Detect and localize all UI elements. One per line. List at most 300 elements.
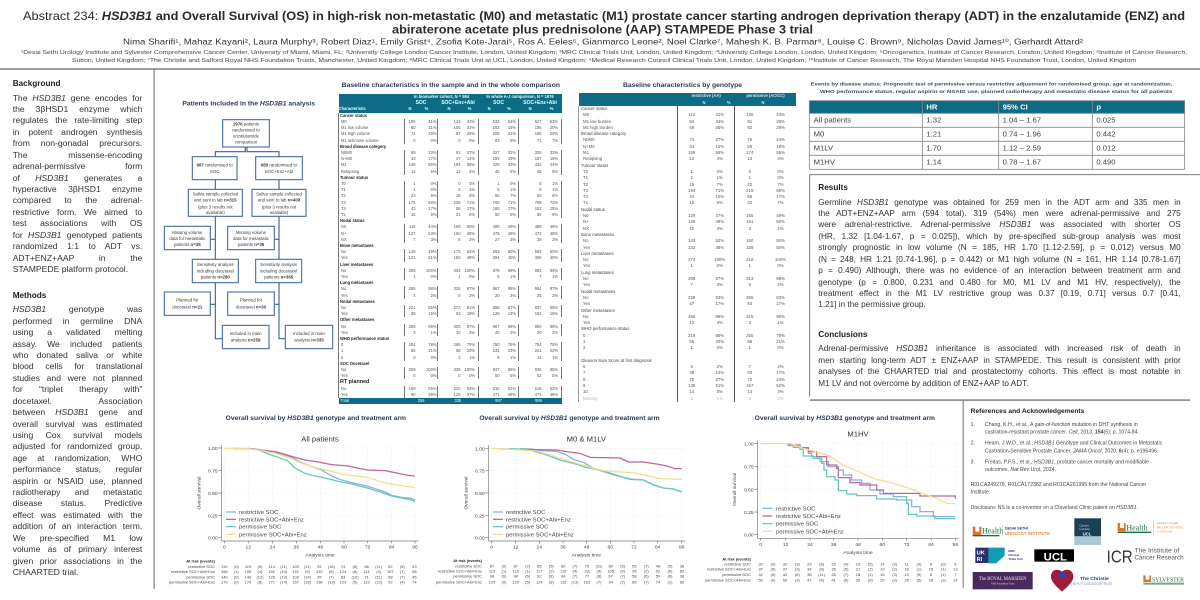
table: baseline characteristics in sample and whole comparison: 0%	[469, 181, 475, 186]
table: baseline characteristics in sample and whole comparison: 982	[535, 268, 542, 273]
table: baseline characteristics by genotype: NX	[583, 226, 589, 231]
text: methods paragraph: using a validated melting	[13, 327, 142, 337]
table: baseline characteristics by genotype: Gleason Sum Score at first diagnosis	[581, 358, 652, 363]
text: background paragraph: restrictive form. We aimed to	[13, 207, 142, 217]
table: baseline characteristics in sample and whole comparison: 27	[495, 237, 500, 242]
table: baseline characteristics in sample and whole comparison: 209	[493, 131, 500, 136]
table: baseline characteristics in sample and whole comparison: 518	[535, 386, 542, 391]
chart: All patients: 84	[389, 545, 395, 551]
risk table: All patients: 123	[340, 580, 347, 585]
table: baseline characteristics in sample and whole comparison: 13%	[508, 311, 516, 316]
table: baseline characteristics in sample and whole comparison: 20%	[550, 125, 558, 130]
affiliations	[21, 49, 1188, 64]
hazard ratio table: 0.78 – 1.67	[1003, 158, 1041, 167]
table: baseline characteristics in sample and whole comparison: 50	[495, 373, 500, 378]
table: baseline characteristics in sample and whole comparison: No	[341, 286, 346, 291]
table: baseline characteristics by genotype: 0%	[717, 345, 723, 350]
table: baseline characteristics in sample and whole comparison: 1%	[552, 274, 558, 279]
risk table: M0 & M1LV: (2)	[644, 569, 649, 574]
table: baseline characteristics in sample and whole comparison: 59	[411, 150, 416, 155]
table: baseline characteristics by genotype: 2%	[777, 396, 784, 401]
table: baseline characteristics by genotype: 7	[749, 364, 751, 369]
table: baseline characteristics in sample and whole comparison: 72%	[550, 200, 558, 205]
table: baseline characteristics in sample and whole comparison: 3%	[552, 237, 558, 242]
table: baseline characteristics in sample and whole comparison: 210	[454, 386, 460, 391]
table: baseline characteristics in sample and whole comparison: M1 high volume	[341, 131, 370, 136]
flowchart box text: analysis n=259	[231, 337, 261, 342]
table: baseline characteristics in sample and whole comparison: T4	[341, 206, 346, 211]
risk table: All patients: 107	[387, 569, 394, 574]
table: baseline characteristics in sample and whole comparison: 2	[458, 187, 460, 192]
table: baseline characteristics in sample and whole comparison: 99%	[508, 268, 516, 273]
table: baseline characteristics in sample and whole comparison: 105	[409, 119, 416, 124]
table: baseline characteristics in sample and whole comparison: 16	[411, 212, 416, 217]
table: baseline characteristics by genotype: 100%	[775, 257, 786, 262]
risk table: M0 & M1LV: (7)	[644, 579, 649, 584]
title	[23, 9, 1185, 37]
results box outline	[810, 175, 1200, 397]
table: baseline characteristics in sample and whole comparison: 52%	[467, 249, 475, 254]
risk table: M0 & M1LV: (7)	[573, 574, 578, 579]
legend: M1HV	[762, 506, 844, 535]
table: baseline characteristics in sample and whole comparison: 37%	[467, 392, 475, 397]
table: baseline characteristics by genotype: 4%	[777, 389, 784, 394]
table: baseline characteristics by genotype: 29%	[776, 125, 785, 130]
logo: UHealth Miller School: Health	[1126, 523, 1148, 532]
risk table: M1HV: permissive SOC+Abi+Enz	[705, 578, 751, 583]
risk table: M1HV: 18	[856, 572, 861, 577]
chart: M1HV: 36	[831, 542, 837, 548]
flowchart box text: Missing volume	[172, 230, 203, 235]
text: methods paragraph: effect was estimated with the	[13, 510, 142, 520]
table: baseline characteristics in sample and whole comparison: 1	[413, 187, 416, 192]
table: baseline characteristics by genotype: 50%	[776, 219, 785, 224]
legend: M1HV: restrictive SOC	[776, 506, 816, 512]
table: baseline characteristics in sample and whole comparison: 708	[535, 200, 542, 205]
flowchart box text: Included in main	[230, 331, 262, 336]
risk table: M1HV: 37	[783, 567, 788, 572]
table: baseline characteristics in sample and whole comparison: 53%	[428, 231, 436, 236]
table: baseline characteristics by genotype: 161	[746, 219, 753, 224]
table: baseline characteristics by genotype: 6	[583, 364, 585, 369]
table: baseline characteristics in sample and whole comparison: %	[425, 106, 428, 111]
chart: M1HV: Overall survival	[732, 473, 738, 506]
table: baseline characteristics in sample and whole comparison: 221	[535, 348, 542, 353]
risk table: M1HV: (4)	[917, 561, 922, 566]
risk table: M1HV: 35	[856, 578, 861, 583]
hazard ratio table: M1HV	[814, 158, 836, 167]
table: baseline characteristics in sample and whole comparison: N0	[341, 224, 346, 229]
risk table: All patients: 45	[412, 574, 417, 579]
flowchart box text: data for metastatic	[169, 236, 206, 241]
text: methods paragraph: performed in germline DNA	[13, 316, 142, 326]
chart: M1HV: 0.75	[744, 464, 754, 470]
text: background paragraph: STAMPEDE platform protocol.	[13, 264, 128, 274]
table: baseline characteristics in sample and whole comparison: 68	[456, 348, 460, 353]
table: baseline characteristics in sample and whole comparison: 967	[493, 324, 500, 329]
logo: UHealth Desai Sethi Urology Institute: DESAI SETHI	[1005, 527, 1028, 531]
risk table: M1HV: 5	[954, 561, 957, 566]
chart: All patients: 96	[412, 545, 418, 551]
title: Abstract 234: HSD3B1 and Overall Survival (OS) in high-risk non-metastatic (M0) and metastatic (M1) prostate cancer starting androgen deprivation therapy (ADT) in the enzalutamide (ENZ) and	[23, 9, 1185, 23]
table: baseline characteristics in sample and whole comparison: 87	[456, 131, 460, 136]
table: baseline characteristics in sample and whole comparison: 969	[535, 324, 542, 329]
table: baseline characteristics in sample and whole comparison: 100%	[465, 367, 475, 372]
table: baseline characteristics in sample and whole comparison: 7%	[510, 193, 516, 198]
table: baseline characteristics in sample and whole comparison: 475	[493, 231, 500, 236]
table: baseline characteristics in sample and whole comparison: 152	[535, 206, 542, 211]
risk table: M0 & M1LV: 95	[632, 569, 637, 574]
table: baseline characteristics by genotype: No	[583, 295, 588, 300]
risk table: M1HV: 25	[831, 572, 837, 577]
table: baseline characteristics in sample and whole comparison: Yes	[341, 255, 348, 260]
logo: Royal Marsden	[973, 572, 1033, 589]
flowchart box text: (plus 3 results not	[198, 204, 233, 209]
table: baseline characteristics by genotype: 48%	[715, 245, 724, 250]
table: baseline characteristics by genotype: 2%	[717, 364, 723, 369]
text: background paragraph: randomized 1:1 to ADT vs.	[13, 241, 142, 251]
heading: baseline table 1: Baseline characteristics in the sample and in the whole comparison	[342, 82, 560, 89]
table: baseline characteristics by genotype: 6	[691, 364, 693, 369]
table: baseline characteristics in sample and whole comparison: 204	[409, 342, 416, 347]
table: baseline characteristics by genotype: 47	[689, 301, 694, 306]
chart: M1HV: 84	[928, 542, 934, 548]
table: baseline characteristics in sample and whole comparison: 5%	[510, 212, 516, 217]
risk table: M1HV: 32	[758, 561, 764, 566]
table: baseline characteristics by genotype: 50%	[776, 245, 785, 250]
legend: M0 & M1LV: permissive SOC+Abi+Enz	[506, 532, 574, 538]
table: baseline characteristics in sample and whole comparison: 258	[409, 268, 416, 273]
risk table: M0 & M1LV: 67	[608, 574, 614, 579]
text: methods paragraph	[12, 304, 142, 577]
chart: M1HV: 60	[880, 542, 885, 548]
table: baseline characteristics in sample and whole comparison: Nodal metastases	[340, 299, 375, 304]
table: baseline characteristics by genotype: 15	[689, 200, 694, 205]
chart: M0 & M1LV: 12	[513, 545, 519, 551]
table: baseline characteristics by genotype: T0	[583, 169, 588, 174]
table: baseline characteristics in sample and whole comparison: 1%	[469, 187, 475, 192]
risk table: All patients: (12)	[256, 574, 264, 579]
table: baseline characteristics by genotype	[578, 93, 796, 402]
table: baseline characteristics in sample and whole comparison: 5	[539, 181, 542, 186]
table: baseline characteristics by genotype: 7	[691, 282, 693, 287]
flowchart box text: patients n=365	[264, 274, 294, 279]
table: baseline characteristics in sample and whole comparison: 52%	[508, 386, 516, 391]
table: baseline characteristics by genotype: 2	[691, 396, 693, 401]
table: baseline characteristics in sample and whole comparison: 7%	[552, 138, 558, 143]
table: baseline characteristics in sample and whole comparison: 79%	[467, 342, 475, 347]
table: baseline characteristics by genotype: Yes	[583, 320, 590, 325]
table: baseline characteristics in sample and whole comparison: 3%	[431, 237, 436, 242]
table: baseline characteristics by genotype: 4%	[717, 320, 723, 325]
table: baseline characteristics in sample and whole comparison: 858	[493, 305, 500, 310]
table: baseline characteristics in sample and whole comparison: 14	[537, 355, 542, 360]
risk table: M1HV: 29	[880, 578, 885, 583]
text: methods paragraph: adjusted for randomized group,	[13, 441, 142, 451]
table: baseline characteristics in sample and whole comparison: 60%	[550, 249, 558, 254]
table: baseline characteristics in sample and whole comparison: 71%	[467, 200, 475, 205]
risk table: M1HV: restrictive SOC	[724, 561, 751, 566]
table: baseline characteristics by genotype: 219	[688, 333, 695, 338]
risk table: All patients: (10)	[280, 569, 288, 574]
text: background paragraph: The missense-encoding	[13, 150, 142, 160]
table: baseline characteristics in sample and whole comparison: SOC+Enz+Abi	[441, 100, 475, 106]
table: baseline characteristics in sample and whole comparison: 95%	[550, 367, 558, 372]
table: baseline characteristics by genotype: 91	[747, 119, 752, 124]
logo: UKRI MRC Clinical Trials Unit: Trials Unit	[1008, 557, 1023, 561]
table: baseline characteristics in sample and whole comparison: 100%	[426, 268, 436, 273]
table: baseline characteristics by genotype: 132	[688, 245, 695, 250]
chart: All patients: 0	[223, 545, 226, 551]
risk table: M0 & M1LV: 129	[489, 579, 496, 584]
table: baseline characteristics in sample and whole comparison: 165	[493, 206, 500, 211]
risk table: All patients: 110	[363, 580, 371, 585]
flowchart box text: docetaxel n=21	[172, 304, 203, 309]
table: baseline characteristics in sample and whole comparison: 56%	[428, 162, 436, 167]
table: baseline characteristics in sample and whole comparison: Yes	[341, 274, 348, 279]
table: baseline characteristics by genotype: 49%	[715, 219, 724, 224]
table: baseline characteristics in sample and whole comparison: 3%	[469, 293, 475, 298]
table: baseline characteristics in sample and whole comparison: 527	[535, 119, 542, 124]
text: background paragraph: the 3βHSD1 enzyme which	[13, 104, 142, 114]
table: baseline characteristics by genotype: 139	[688, 383, 695, 388]
risk table: All patients: 83	[341, 574, 346, 579]
table: baseline characteristics in sample and whole comparison	[338, 94, 562, 404]
table: baseline characteristics in sample and whole comparison: 425	[493, 162, 500, 167]
table: baseline characteristics by genotype: 97%	[715, 276, 724, 281]
table: baseline characteristics by genotype: permissive (AC/CC)	[746, 93, 785, 98]
table: baseline characteristics in sample and whole comparison: 593	[535, 249, 542, 254]
table: baseline characteristics in sample and whole comparison: 27%	[467, 150, 475, 155]
table: baseline characteristics in sample and whole comparison: 71%	[508, 200, 516, 205]
chart: M1HV: Analysis time	[843, 550, 873, 556]
table: baseline characteristics by genotype: 159	[746, 245, 753, 250]
table: baseline characteristics in sample and whole comparison: 5	[497, 187, 500, 192]
table: baseline characteristics by genotype: 53	[747, 370, 752, 375]
table: baseline characteristics by genotype: 194	[688, 188, 695, 193]
table: baseline characteristics in sample and whole comparison: 5%	[431, 169, 436, 174]
table: baseline characteristics in sample and whole comparison: 20	[537, 330, 542, 335]
risk table: All patients: 124	[340, 569, 347, 574]
table: baseline characteristics in sample and whole comparison: 0%	[431, 355, 436, 360]
table: baseline characteristics in sample and whole comparison: Bone metastases	[340, 243, 374, 248]
table: baseline characteristics in sample and whole comparison: 49%	[550, 224, 558, 229]
risk table: M1HV: (0)	[771, 567, 776, 572]
risk table: M0 & M1LV: 73	[585, 563, 590, 568]
table: baseline characteristics in sample and whole comparison: 2%	[552, 330, 558, 335]
hazard ratio caption	[811, 82, 1173, 95]
risk table: M0 & M1LV: (0)	[502, 579, 507, 584]
chart: All patients: All patients	[301, 435, 339, 444]
table: baseline characteristics in sample and whole comparison: 979	[493, 268, 500, 273]
hazard ratio table	[809, 101, 1185, 169]
table: baseline characteristics in sample and whole comparison: 7	[539, 274, 542, 279]
risk table: M0 & M1LV: 119	[489, 569, 496, 574]
table: baseline characteristics by genotype: 20%	[715, 339, 724, 344]
text: background paragraph: from non-gonadal precursors.	[13, 138, 142, 148]
risk table: All patients: (5)	[400, 564, 405, 569]
chart: M0 & M1LV: 36	[560, 545, 566, 551]
table: baseline characteristics in sample and whole comparison: 1	[413, 181, 416, 186]
risk table: M0 & M1LV: (13)	[571, 579, 579, 584]
table: baseline characteristics by genotype: 17%	[776, 301, 785, 306]
risk table: All patients: (11)	[375, 564, 383, 569]
table: baseline characteristics in sample and whole comparison: 238	[454, 200, 460, 205]
risk table: M0 & M1LV: 117	[536, 569, 543, 574]
table: baseline characteristics by genotype: Broad disease category	[581, 131, 626, 136]
table: baseline characteristics by genotype: 21%	[776, 339, 785, 344]
table: baseline characteristics in sample and whole comparison: 160	[454, 231, 460, 236]
table: baseline characteristics in sample and whole comparison: 55	[411, 348, 416, 353]
risk table: M1HV: 15	[929, 567, 934, 572]
table: baseline characteristics by genotype: Yes	[583, 263, 590, 268]
table: baseline characteristics in sample and whole comparison: 3	[413, 330, 416, 335]
table: baseline characteristics in sample and whole comparison: 3%	[469, 330, 475, 335]
table: baseline characteristics in sample and whole comparison: 85%	[428, 305, 436, 310]
risk table: M0 & M1LV: 84	[561, 574, 566, 579]
risk table: All patients: 132	[316, 569, 323, 574]
chart: M0 & M1LV: 84	[655, 545, 661, 551]
text: methods paragraph: HSD3B1 genotype was	[13, 304, 142, 314]
table: baseline characteristics in sample and whole comparison: No	[341, 305, 346, 310]
chart: All patients	[169, 416, 418, 585]
table: baseline characteristics in sample and whole comparison: 20%	[550, 131, 558, 136]
table: baseline characteristics in sample and whole comparison: 0	[458, 373, 460, 378]
table: baseline characteristics by genotype: 318	[746, 257, 753, 262]
table: baseline characteristics by genotype: 34	[689, 144, 694, 149]
text: methods paragraph: performance status, regular	[13, 464, 142, 474]
table: baseline characteristics in sample and whole comparison: M1 low volume	[341, 125, 368, 130]
table: baseline characteristics in sample and whole comparison: 2%	[469, 237, 475, 242]
risk table: All patients: 156	[221, 569, 228, 574]
text: methods paragraph: age at randomization, WHO	[13, 453, 142, 463]
table: baseline characteristics in sample and whole comparison: N	[529, 106, 532, 111]
table: baseline characteristics in sample and whole comparison: 265	[454, 342, 460, 347]
table: baseline characteristics in sample and whole comparison: 9	[458, 293, 460, 298]
table: baseline characteristics by genotype: No	[583, 257, 588, 262]
table: baseline characteristics in sample and whole comparison: 6%	[469, 212, 475, 217]
logo: UKRI MRC Clinical Trials Unit	[975, 548, 1023, 563]
logo: UCL Cancer Institute: Institute	[1079, 527, 1090, 531]
risk table: M0 & M1LV: 87	[490, 563, 495, 568]
table: baseline characteristics in sample and whole comparison: 335	[454, 367, 460, 372]
references and acknowledgements: 2.	[971, 441, 975, 447]
table: baseline characteristics by genotype: 2%	[777, 282, 784, 287]
table: baseline characteristics in sample and whole comparison: 98%	[508, 324, 516, 329]
risk table: M0 & M1LV: (4)	[573, 569, 578, 574]
risk table: M0 & M1LV: (2)	[549, 569, 554, 574]
risk table: M1HV: 19	[856, 561, 861, 566]
table: baseline characteristics in sample and whole comparison: 7	[413, 237, 416, 242]
table: baseline characteristics by genotype: 0%	[777, 263, 784, 268]
legend: M1HV: restrictive SOC+Abi+Enz	[776, 514, 841, 520]
table: baseline characteristics in sample and whole comparison: 1%	[510, 187, 516, 192]
table: baseline characteristics in sample and whole comparison: 14%	[467, 156, 475, 161]
risk table: M0 & M1LV: 82	[680, 569, 685, 574]
table: baseline characteristics in sample and whole comparison: 44%	[550, 162, 558, 167]
risk table: All patients: permissive SOC	[186, 574, 215, 579]
risk table: M0 & M1LV: 58	[632, 574, 637, 579]
chart: M1HV: 48	[855, 542, 861, 548]
table: baseline characteristics by genotype: 1	[749, 263, 751, 268]
flowchart box text: data for metastatic	[233, 236, 270, 241]
table: baseline characteristics in sample and whole comparison: 60%	[508, 249, 516, 254]
risk table: M0 & M1LV: (7)	[644, 563, 649, 568]
affiliations: ¹Desai Sethi Urology Institute and Sylvester Comprehensive Cancer Center, University of Miami, Miami, FL; ²University College London Cancer Institute, London, United Kingdom; ³MRC Clinical Trials Unit, London, United Kingdom; ⁴University College London, London, United Kingdom; ⁵Oncogenetics, Institute of Cancer Research, London, United Kingdom; ⁶Institute of Cancer Research,	[21, 49, 1188, 56]
flowchart box text: including docetaxel	[197, 268, 234, 273]
text: background paragraph: ADT+ENZ+AAP in the	[13, 252, 142, 262]
risk table: M1HV: (1)	[941, 572, 946, 577]
flowchart box text: 1976 patients	[233, 121, 260, 126]
risk table: M1HV: (5)	[917, 572, 922, 577]
table: baseline characteristics in sample and whole comparison: 17%	[508, 206, 516, 211]
table: baseline characteristics in sample and whole comparison: 489	[535, 224, 542, 229]
risk table: All patients: 109	[292, 574, 300, 579]
risk table: M0 & M1LV: 92	[537, 574, 542, 579]
table: baseline characteristics by genotype: 1%	[777, 320, 784, 325]
risk table: M0 & M1LV: (11)	[596, 563, 603, 568]
logo: UKRI MRC Clinical Trials Unit: RI	[977, 557, 983, 563]
risk table: All patients: 71	[364, 574, 370, 579]
table: baseline characteristics in sample and whole comparison: 936	[535, 367, 542, 372]
table: baseline characteristics by genotype: 18%	[776, 144, 785, 149]
table: baseline characteristics in sample and whole comparison: 48%	[467, 231, 475, 236]
risk table: M1HV: (8)	[819, 567, 825, 572]
logo: Institute of Cancer Research: ICR	[1107, 547, 1133, 567]
risk table: All patients: restrictive SOC	[188, 564, 215, 569]
risk table: All patients: (4)	[400, 580, 405, 585]
text: conclusions paragraph: Adrenal-permissive HSD3B1 inheritance is associated with increased risk of death in	[818, 344, 1181, 353]
table: baseline characteristics in sample and whole comparison: 325	[535, 150, 542, 155]
table: baseline characteristics in sample and whole comparison: 15%	[428, 311, 436, 316]
table: baseline characteristics by genotype: M0	[583, 112, 589, 117]
risk table: M1HV: (3)	[795, 567, 800, 572]
risk table: M1HV: (6)	[868, 578, 873, 583]
risk table: All patients: 95	[317, 574, 322, 579]
risk table: M1HV: 37	[758, 567, 764, 572]
table: baseline characteristics in sample and whole comparison: WHO performance status	[340, 336, 389, 341]
chart: M0 & M1LV: 60	[608, 545, 613, 551]
table: baseline characteristics by genotype: 17%	[715, 301, 724, 306]
table: baseline characteristics in sample and whole comparison: 0	[458, 181, 460, 186]
table: baseline characteristics by genotype: 265	[688, 314, 695, 319]
table: baseline characteristics by genotype: 68	[747, 339, 752, 344]
table: baseline characteristics by genotype: 9	[583, 383, 585, 388]
heading: conclusions: Conclusions	[818, 330, 867, 339]
table: baseline characteristics by genotype: 23%	[776, 377, 785, 382]
table: baseline characteristics in sample and whole comparison: 46	[495, 169, 500, 174]
authors: Nima Sharifi¹, Mahaz Kayani², Laura Murphy³, Robert Diaz¹, Emily Grist⁴, Zsofia Kote-Jarai⁵, Ros A. Eeles⁶, Gianmarco Leone², Noel Clarke⁷, Mahesh K. B. Parmar⁸, Louise C. Brown⁹, Nicholas David James¹⁰, Gerhardt Attard²	[123, 38, 1083, 47]
table: baseline characteristics by genotype: 313	[746, 276, 753, 281]
table: baseline characteristics in sample and whole comparison: 5%	[552, 373, 558, 378]
table: baseline characteristics in sample and whole comparison: %	[468, 106, 471, 111]
risk table: M1HV: 11	[905, 561, 910, 566]
text: results paragraph: strongly prognostic in low volume (N = 185, HR 1.70 [1.12-2.59], p = 0.012) versus M0	[818, 243, 1181, 252]
table: baseline characteristics in sample and whole comparison: 33%	[508, 150, 516, 155]
text: background paragraph: The HSD3B1 gene encodes for	[13, 93, 142, 103]
table: baseline characteristics in sample and whole comparison: In whole A-J comparison, N = 1976	[486, 94, 554, 98]
table: baseline characteristics in sample and whole comparison: 4%	[469, 169, 475, 174]
table: baseline characteristics in sample and whole comparison: 9%	[431, 193, 436, 198]
risk table: M1HV: 41	[831, 578, 837, 583]
table: baseline characteristics by genotype: 51%	[715, 383, 724, 388]
table: baseline characteristics by genotype: M1 high burden	[583, 125, 613, 130]
table: baseline characteristics in sample and whole comparison: Characteristic	[338, 106, 366, 111]
table: baseline characteristics by genotype: 3	[749, 226, 751, 231]
table: baseline characteristics by genotype: T1	[583, 175, 588, 180]
table: baseline characteristics by genotype: 4%	[717, 226, 723, 231]
chart: M1HV	[705, 416, 959, 583]
